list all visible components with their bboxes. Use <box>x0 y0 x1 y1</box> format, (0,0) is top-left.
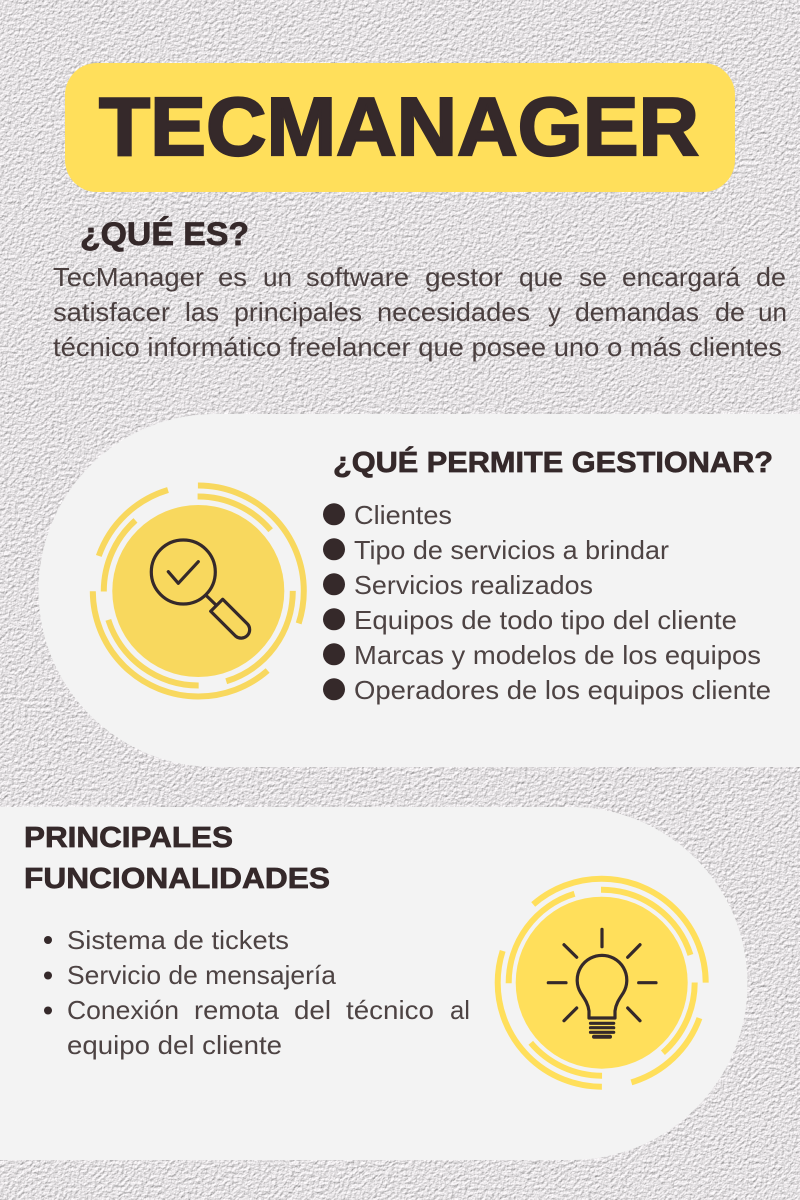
text block: description: encargará <box>622 262 741 292</box>
list: funcionalidades: del <box>294 995 331 1025</box>
text block: description: gestor <box>425 262 503 292</box>
text block: description: principales <box>234 297 362 327</box>
panel: qué permite gestionar <box>39 414 800 767</box>
list: elementos gestionados <box>323 500 771 705</box>
heading: qué es: ¿QUÉ ES? <box>80 216 249 252</box>
text block: description: un <box>263 262 292 292</box>
list: funcionalidades: al <box>450 995 470 1025</box>
text block: description: satisfacer <box>53 297 170 327</box>
heading: principales funcionalidades <box>24 822 330 895</box>
list: funcionalidades: remota <box>194 995 280 1025</box>
text block: description: necesidades <box>377 297 530 327</box>
text block: description: software <box>306 262 409 292</box>
list: elementos gestionados: Equipos de todo tipo del cliente <box>354 605 737 635</box>
list: elementos gestionados: Tipo de servicios a brindar <box>354 535 669 565</box>
icon: light bulb <box>498 879 706 1087</box>
list: elementos gestionados: Servicios realizados <box>354 570 593 600</box>
list: elementos gestionados: Operadores de los equipos cliente <box>354 675 771 705</box>
text block: description: de <box>715 297 745 327</box>
text block: description: que <box>519 262 563 292</box>
title banner: TECMANAGER <box>99 80 699 173</box>
text block: description: y <box>548 297 561 327</box>
title banner <box>65 63 735 192</box>
heading: principales funcionalidades: FUNCIONALIDADES <box>24 863 330 895</box>
list: funcionalidades: equipo del cliente <box>67 1030 282 1060</box>
list: funcionalidades: Sistema de tickets <box>67 925 289 955</box>
list: funcionalidades: técnico <box>346 995 434 1025</box>
text block: description <box>53 262 787 362</box>
icon: magnifying glass with check <box>93 486 304 696</box>
text block: description: es <box>218 262 247 292</box>
text block: description: se <box>579 262 607 292</box>
list: funcionalidades: Servicio de mensajería <box>67 960 337 990</box>
text block: description: TecManager <box>53 262 204 292</box>
list: funcionalidades: Conexión <box>67 995 179 1025</box>
list: elementos gestionados: Marcas y modelos de los equipos <box>354 640 761 670</box>
text block: description: de <box>756 262 786 292</box>
panel: principales funcionalidades <box>0 807 748 1160</box>
text block: description: técnico informático freelancer que posee uno o más clientes <box>53 332 782 362</box>
list: elementos gestionados: Clientes <box>354 500 452 530</box>
heading: principales funcionalidades: PRINCIPALES <box>24 822 233 854</box>
text block: description: las <box>185 297 219 327</box>
text block: description: demandas <box>575 297 699 327</box>
list: funcionalidades <box>44 925 470 1060</box>
heading: qué permite gestionar: ¿QUÉ PERMITE GESTIONAR? <box>333 445 773 479</box>
text block: description: un <box>758 297 787 327</box>
